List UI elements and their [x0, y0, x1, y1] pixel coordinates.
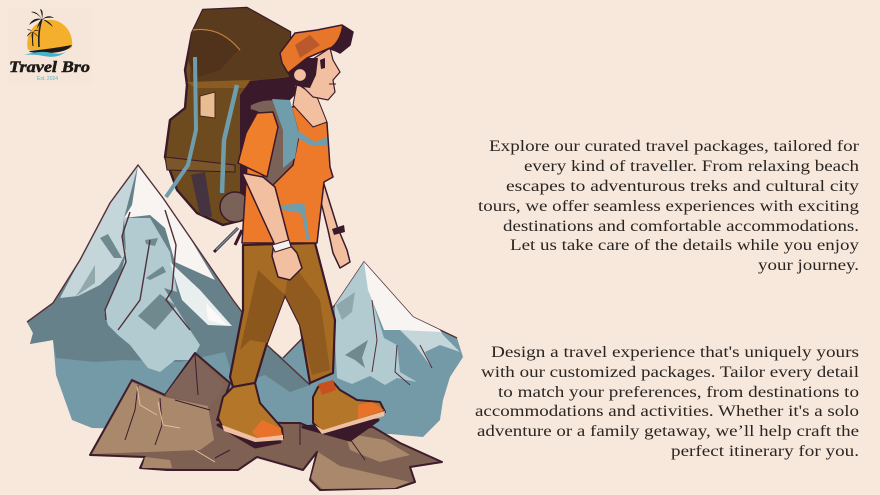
- pants: [230, 243, 335, 387]
- text block: travel packages: your journey.: [758, 257, 859, 274]
- text block: customized packages: with our customized packages. Tailor every detail: [481, 364, 860, 381]
- right mountain faces: [335, 262, 417, 385]
- mountain teal base: [27, 165, 463, 437]
- illustration: hiker: [218, 25, 385, 447]
- text block: travel packages: every kind of traveller. From relaxing beach: [524, 158, 859, 175]
- text block: customized packages: [475, 344, 860, 460]
- text block: customized packages: Design a travel experience that's uniquely yours: [491, 344, 859, 361]
- cap: [280, 25, 353, 73]
- straps on pack: [166, 57, 196, 197]
- illustration: backpack: [165, 8, 298, 252]
- head: [293, 48, 340, 100]
- mountain outlines: [27, 165, 457, 385]
- left mountain snow cap: [124, 165, 215, 280]
- illustration: rocks: [90, 353, 442, 490]
- near arm: [242, 173, 302, 280]
- logo: Travel Bro: Est. 2024: [37, 76, 58, 82]
- text block: customized packages: accommodations and activities. Whether it's a solo: [475, 403, 859, 420]
- sleeve: [238, 112, 278, 177]
- text block: travel packages: [478, 138, 860, 274]
- left mountain left face: [60, 165, 138, 298]
- text block: travel packages: tours, we offer seamless experiences with exciting: [478, 198, 859, 215]
- text block: customized packages: adventure or a family getaway, we’ll help craft the: [477, 423, 859, 440]
- text block: travel packages: Let us take care of the details while you enjoy: [510, 237, 859, 254]
- text block: travel packages: destinations and comfortable accommodations.: [503, 218, 859, 235]
- text block: customized packages: to match your preferences, from destinations to: [498, 384, 859, 401]
- far arm: [318, 181, 350, 268]
- illustration: snowy mountains: [27, 165, 463, 437]
- logo: Travel Bro: Travel Bro: [9, 59, 90, 76]
- boots and shadows: [218, 420, 378, 447]
- text block: travel packages: Explore our curated travel packages, tailored for: [489, 138, 860, 155]
- neck: [293, 84, 327, 127]
- dark gap behind neck: [240, 77, 298, 222]
- shoulder strap: [250, 100, 299, 188]
- torso and shirt: [242, 105, 333, 243]
- text block: customized packages: perfect itinerary for you.: [671, 443, 859, 460]
- left mountain main face: [104, 218, 200, 372]
- text block: travel packages: escapes to adventurous treks and cultural city: [506, 178, 859, 195]
- mountain dark shade: [27, 165, 267, 362]
- logo: Travel Bro: [8, 8, 92, 85]
